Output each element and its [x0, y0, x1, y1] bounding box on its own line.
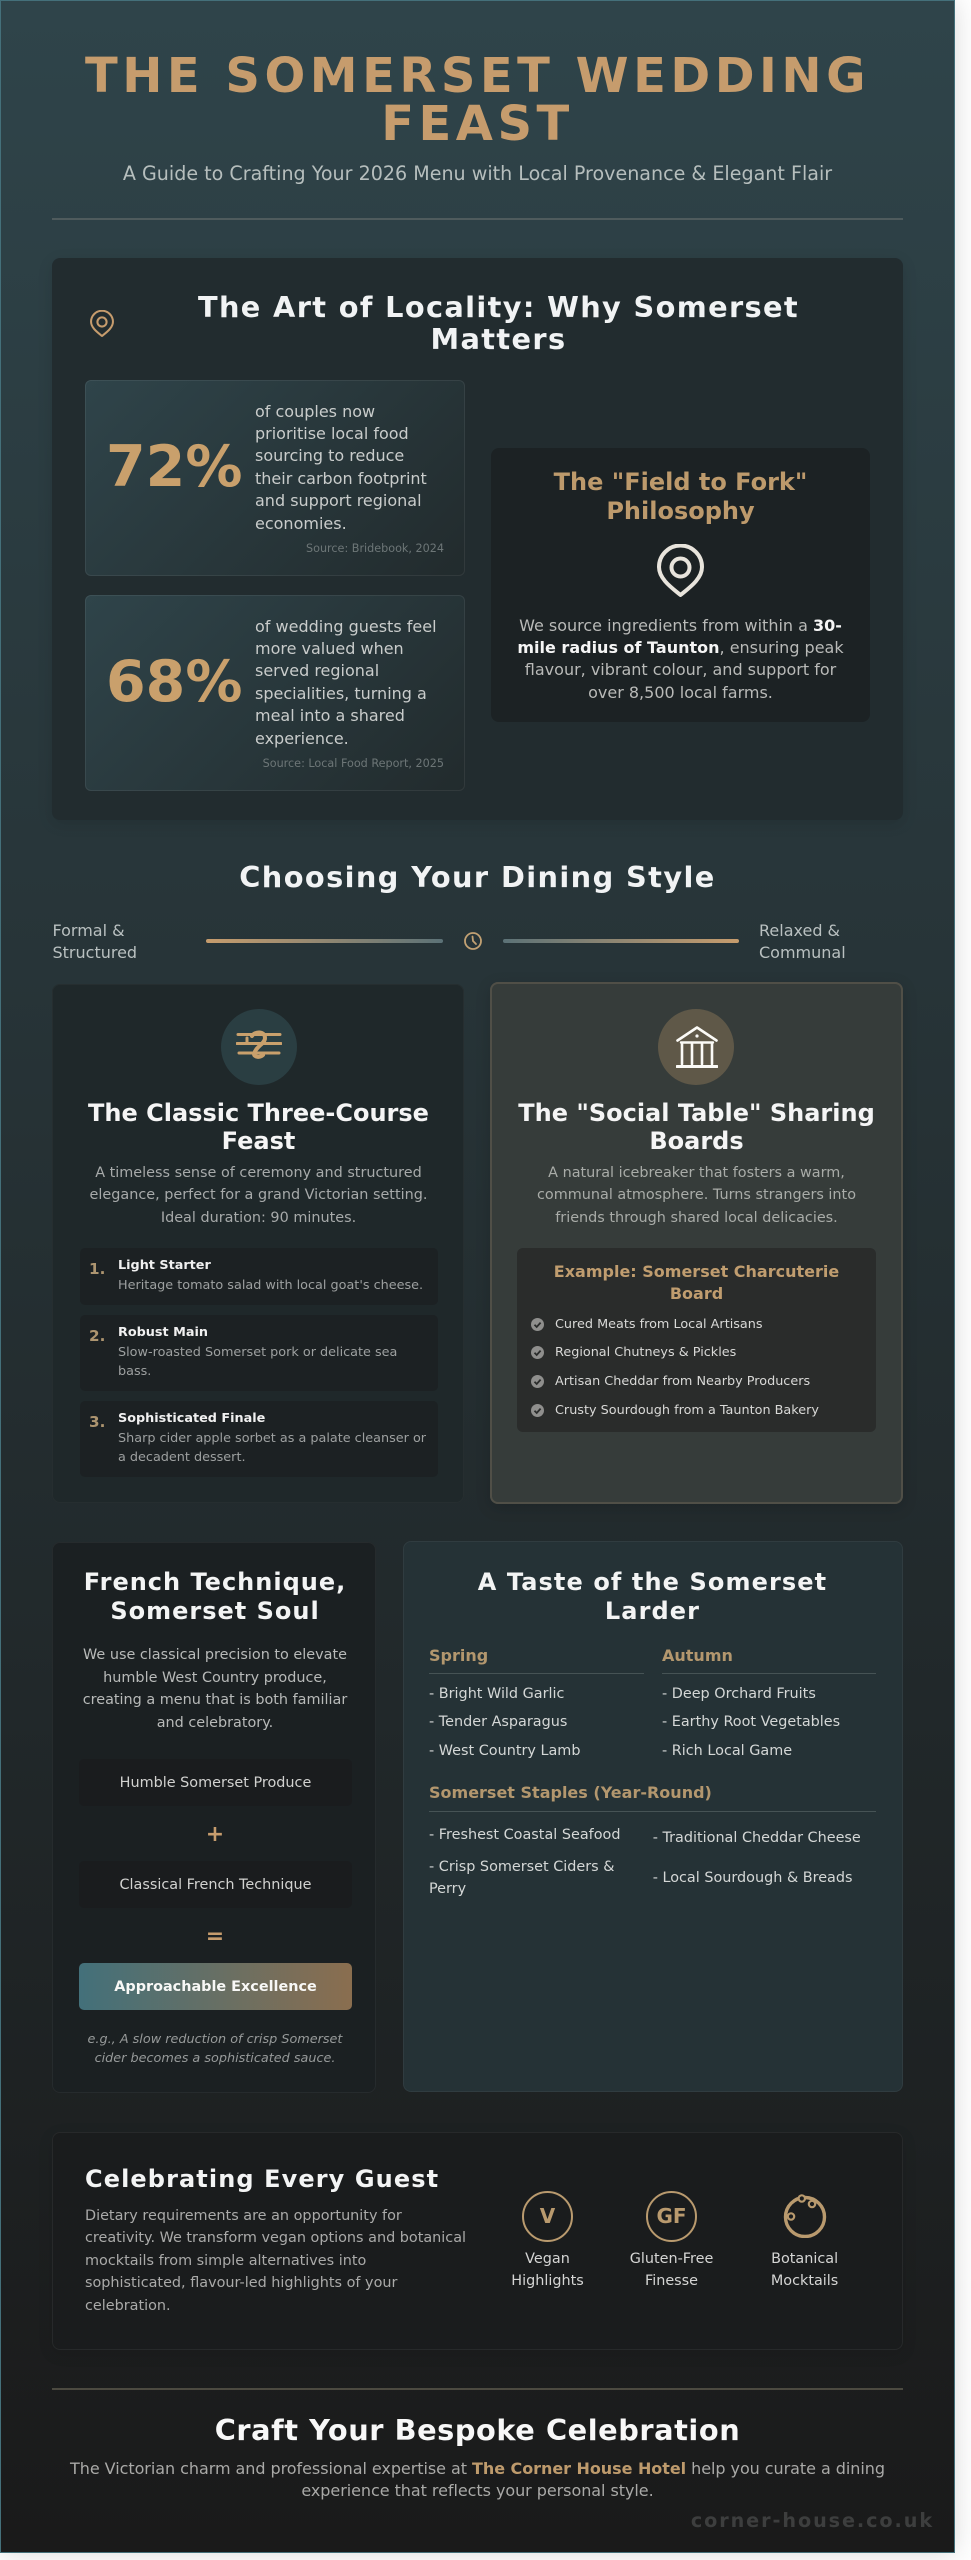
footnote: cider becomes a sophisticated sauce. [95, 2051, 335, 2066]
course description: Heritage tomato salad with local goat's cheese. [118, 1278, 423, 1292]
icon: gluten free: GF [656, 2204, 687, 2228]
heading: art of locality: The Art of Locality: Why Somerset [198, 290, 799, 324]
course title: Sophisticated Finale [118, 1410, 265, 1426]
equation box: produce [79, 1759, 352, 1806]
spring heading: Spring [429, 1646, 488, 1664]
course 2 [80, 1315, 438, 1391]
course description: Slow-roasted Somerset pork or delicate sea [118, 1344, 397, 1360]
label: botanical: Botanical [771, 2250, 838, 2266]
slider label: formal [52, 920, 137, 962]
closing text: The Victorian charm and professional expertise at The Corner House Hotel help you curate a dining [70, 2459, 885, 2478]
plus sign: + [206, 1822, 224, 1847]
callout: field to fork philosophy [491, 448, 870, 722]
spring list: - Tender Asparagus [429, 1714, 567, 1730]
card heading: Boards [649, 1127, 744, 1155]
card heading: The "Social Table" Sharing [518, 1099, 875, 1127]
closing text: experience that reflects your personal style. [301, 2481, 654, 2500]
course description [118, 1344, 397, 1379]
description: creating a menu that is both familiar [83, 1692, 347, 1708]
example board [517, 1248, 876, 1432]
slider label: relaxed: Communal [759, 943, 846, 962]
description: We use classical precision to elevate [83, 1647, 347, 1663]
heading: A Taste of the Somerset [478, 1568, 827, 1596]
subtitle: A Guide to Crafting Your 2026 Menu with Local Provenance & Elegant Flair [123, 162, 832, 184]
panel: taste of the somerset larder [403, 1541, 903, 2092]
label: gluten free [630, 2250, 713, 2289]
website watermark: corner-house.co.uk [691, 2509, 934, 2532]
description: mocktails from simple alternatives into [85, 2253, 366, 2269]
slider label: formal: Formal & [52, 920, 125, 940]
label: gluten free: Finesse [645, 2273, 698, 2289]
card description [537, 1165, 856, 1226]
staples heading: Somerset Staples (Year-Round) [429, 1783, 712, 1802]
list item: Regional Chutneys & Pickles [555, 1345, 736, 1360]
icon: building [676, 1026, 718, 1068]
icon: gluten free [646, 2190, 697, 2242]
spring list: - West Country Lamb [429, 1743, 580, 1759]
callout heading: Philosophy [606, 496, 755, 524]
slider bar: left [206, 939, 443, 942]
callout heading: The "Field to Fork" [554, 468, 807, 496]
heading [478, 1568, 827, 1624]
description [85, 2208, 466, 2314]
callout heading [554, 468, 807, 524]
course number: 3. [89, 1413, 105, 1431]
card description: friends through shared local delicacies. [555, 1210, 838, 1226]
icon: vegan [522, 2190, 573, 2242]
panel: french technique, somerset soul [52, 1542, 376, 2093]
list item: Cured Meats from Local Artisans [555, 1316, 763, 1332]
label: gluten free: Gluten-Free [630, 2250, 713, 2266]
card description [90, 1165, 427, 1226]
spring list: - Bright Wild Garlic [429, 1686, 564, 1702]
autumn list: - Deep Orchard Fruits [662, 1686, 816, 1702]
card heading: Feast [222, 1127, 295, 1155]
callout text: mile radius of Taunton, ensuring peak [517, 638, 844, 657]
staple: ciders [429, 1858, 614, 1897]
stat description: economies. [255, 514, 347, 533]
description: celebration. [85, 2298, 171, 2314]
heading: French Technique, [84, 1568, 346, 1596]
spring list [429, 1686, 580, 1759]
equation box: produce: Humble Somerset Produce [120, 1775, 311, 1791]
stat card: 72 percent [85, 380, 465, 576]
autumn list [662, 1686, 840, 1759]
icon: clock [464, 932, 482, 950]
icon circle [658, 1009, 734, 1085]
course description: a decadent dessert. [118, 1450, 246, 1465]
stat number 68%: 68% [106, 649, 242, 715]
equation result [79, 1963, 352, 2010]
heading: craft your bespoke celebration: Craft Your Bespoke Celebration [215, 2413, 740, 2447]
course number: 1. [89, 1260, 105, 1278]
check icon [531, 1318, 544, 1331]
equation result: Approachable Excellence [114, 1979, 317, 1995]
stat source: Source: Local Food Report, 2025 [263, 756, 444, 770]
label: botanical: Mocktails [771, 2273, 838, 2289]
footnote [88, 2032, 343, 2066]
stat description: experience. [255, 729, 349, 748]
example heading: Board [670, 1284, 723, 1303]
heading: Larder [605, 1596, 700, 1624]
description [83, 1647, 348, 1731]
stat description: prioritise local food [255, 424, 409, 443]
card description: Ideal duration: 90 minutes. [161, 1210, 356, 1226]
stat description: served regional [255, 661, 379, 680]
label: vegan: Vegan [525, 2250, 570, 2266]
panel: the art of locality [52, 258, 903, 820]
slider bar: right [503, 939, 739, 942]
footnote: e.g., A slow reduction of crisp Somerset [88, 2032, 342, 2047]
course title: Light Starter [118, 1258, 211, 1272]
stat description: sourcing to reduce [255, 446, 404, 465]
check icon [531, 1346, 544, 1359]
list item: Artisan Cheddar from Nearby Producers [555, 1374, 810, 1389]
slider label: relaxed: Relaxed & [759, 920, 840, 940]
slider label: formal: Structured [52, 943, 137, 962]
description: humble West Country produce, [103, 1670, 327, 1686]
list item: Crusty Sourdough from a Taunton Bakery [555, 1403, 819, 1418]
callout text: over 8,500 local farms. [588, 683, 773, 702]
panel: social table sharing boards [490, 982, 903, 1504]
example heading: Example: Somerset Charcuterie [554, 1262, 839, 1280]
autumn heading: Autumn [662, 1646, 733, 1664]
example heading [554, 1262, 839, 1303]
icon: botanical [784, 2194, 826, 2238]
staple: ciders: - Crisp Somerset Ciders & [429, 1858, 614, 1874]
heading: art of locality: Matters [431, 322, 566, 356]
check icon [531, 1404, 544, 1417]
description: Dietary requirements are an opportunity for [85, 2208, 402, 2224]
stat description [255, 616, 437, 748]
heading: art of locality [198, 290, 799, 356]
stat description: more valued when [255, 639, 404, 658]
equation box: technique: Classical French Technique [119, 1877, 312, 1893]
title: THE SOMERSET WEDDING [85, 48, 870, 104]
slider label: relaxed [759, 920, 846, 962]
card heading [518, 1099, 875, 1155]
autumn list: - Earthy Root Vegetables [662, 1714, 840, 1730]
card description: communal atmosphere. Turns strangers into [537, 1187, 856, 1203]
staple: ciders: Perry [429, 1881, 466, 1897]
stat description: their carbon footprint [255, 469, 427, 488]
icon: vegan: V [540, 2204, 555, 2228]
label: vegan: Highlights [511, 2273, 584, 2289]
description: creativity. We transform vegan options and botanical [85, 2230, 466, 2246]
card description: A timeless sense of ceremony and structured [95, 1165, 422, 1181]
stat description: specialities, turning a [255, 684, 427, 703]
callout text: We source ingredients from within a 30- [519, 616, 842, 634]
staple: seafood: - Freshest Coastal Seafood [429, 1826, 620, 1842]
heading: Somerset Soul [110, 1596, 320, 1624]
stat description: and support regional [255, 491, 422, 510]
stat description [255, 402, 427, 533]
course description: Sharp cider apple sorbet as a palate cleanser or [118, 1430, 426, 1446]
stat description: meal into a shared [255, 706, 405, 725]
label: vegan [511, 2250, 584, 2289]
equation box: technique [79, 1861, 352, 1908]
icon circle [220, 1009, 296, 1085]
equals sign: = [206, 1924, 224, 1948]
stat description: of wedding guests feel [255, 616, 437, 636]
callout text [517, 616, 844, 702]
card heading: The Classic Three-Course [88, 1099, 429, 1127]
heading: Celebrating Every Guest [85, 2164, 439, 2192]
title [85, 48, 870, 152]
course 3 [80, 1401, 438, 1477]
title: FEAST [381, 96, 574, 152]
description: and celebratory. [157, 1715, 273, 1731]
icon: cutlery lines [236, 1030, 282, 1059]
card description: elegance, perfect for a grand Victorian setting. [90, 1187, 427, 1203]
card description: A natural icebreaker that fosters a warm, [548, 1165, 845, 1181]
heading [84, 1568, 346, 1624]
autumn list: - Rich Local Game [662, 1743, 792, 1759]
icon: small location pin [90, 310, 114, 337]
course number: 2. [89, 1327, 105, 1345]
stat description: of couples now [255, 402, 375, 420]
closing text [70, 2459, 885, 2500]
course 1 [80, 1248, 438, 1305]
icon: location pin [657, 544, 704, 597]
course description [118, 1430, 426, 1465]
check icon [531, 1375, 544, 1388]
description: sophisticated, flavour-led highlights of your [85, 2275, 397, 2291]
stat card: 68 percent [85, 595, 465, 791]
panel: celebrating every guest [52, 2132, 903, 2350]
stat number 72%: 72% [106, 434, 242, 500]
staple: cheddar: - Traditional Cheddar Cheese [653, 1830, 861, 1846]
heading: choosing your dining style: Choosing Your Dining Style [239, 860, 716, 894]
staple: breads: - Local Sourdough & Breads [653, 1870, 853, 1886]
course title: Robust Main [118, 1324, 208, 1340]
callout text: flavour, vibrant colour, and support for [525, 660, 836, 679]
stat source: Source: Bridebook, 2024 [306, 542, 444, 554]
card heading [88, 1099, 429, 1155]
course description: bass. [118, 1364, 151, 1379]
label: botanical [771, 2250, 838, 2289]
panel: classic three-course feast [52, 984, 464, 1502]
